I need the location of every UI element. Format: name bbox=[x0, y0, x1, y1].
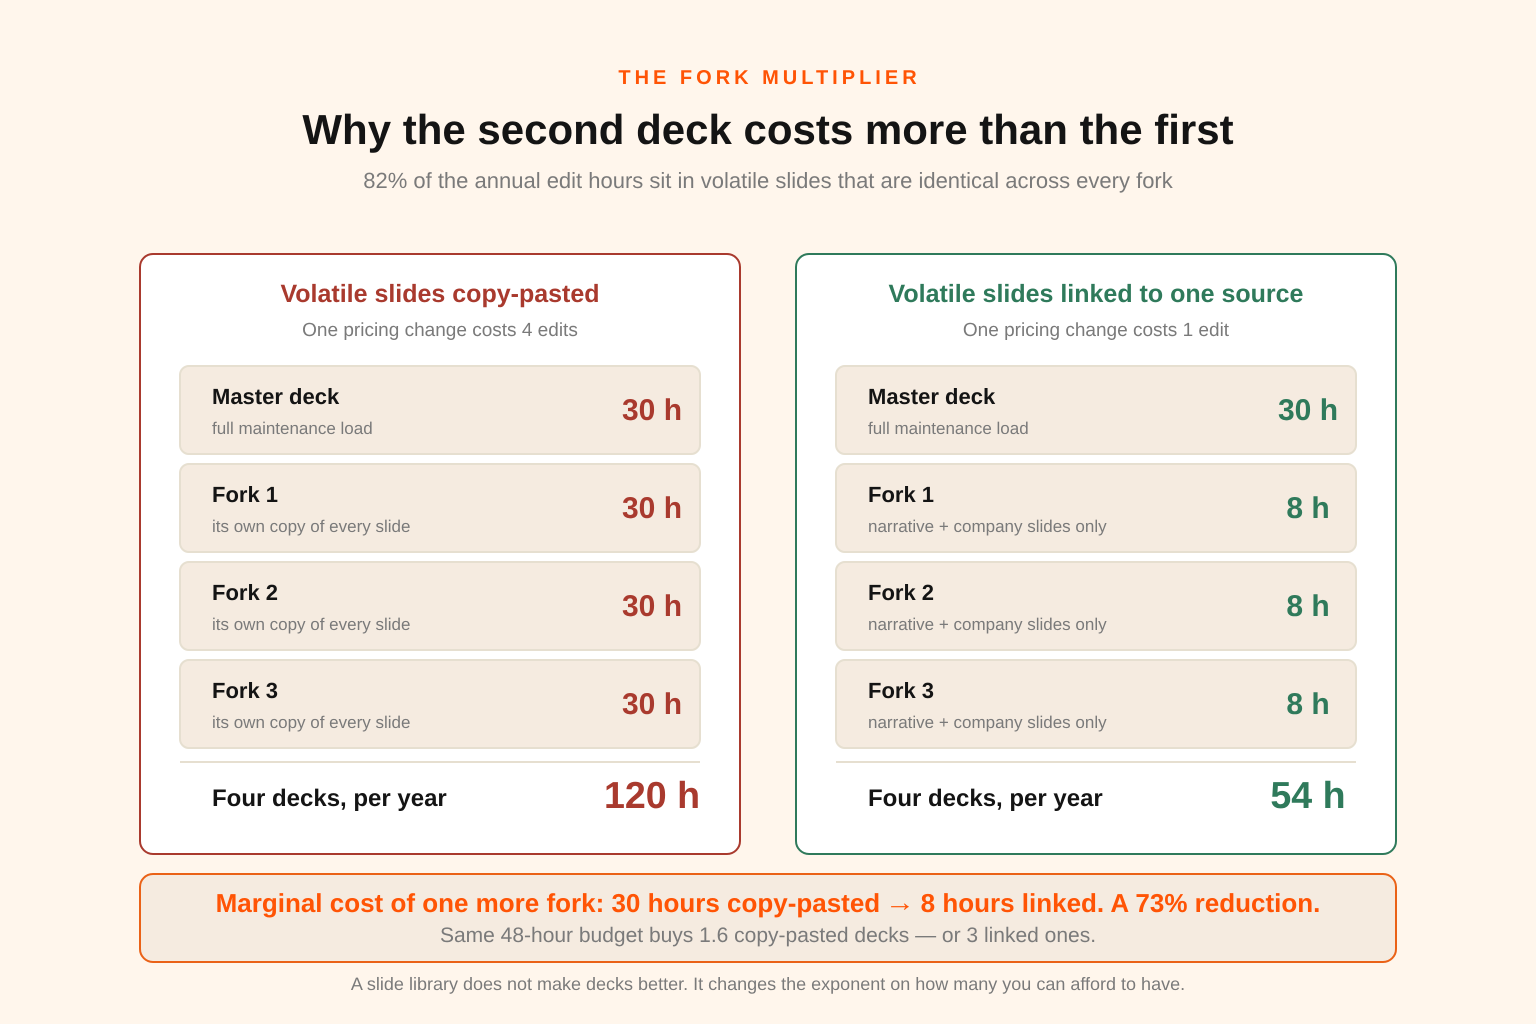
callout subline: Same 48-hour budget buys 1.6 copy-pasted decks — or 3 linked ones. bbox=[440, 924, 1096, 947]
row: fork 1 bbox=[835, 463, 1357, 553]
footer note: A slide library does not make decks better. It changes the exponent on how many you can afford to have. bbox=[351, 974, 1185, 994]
panel subheading: One pricing change costs 1 edit bbox=[963, 320, 1229, 341]
total value: 120 h bbox=[604, 774, 700, 816]
row: fork 3: Fork 3 bbox=[868, 678, 934, 703]
row: fork 1: Fork 1 bbox=[868, 482, 934, 507]
row: fork 1: Fork 1 bbox=[212, 482, 278, 507]
panel heading: Volatile slides copy-pasted bbox=[280, 280, 600, 308]
total value: 54 h bbox=[1270, 774, 1346, 816]
row: master deck: 30 h bbox=[622, 394, 682, 427]
subtitle: 82% of the annual edit hours sit in volatile slides that are identical across every fork bbox=[363, 168, 1173, 193]
row: fork 3: narrative + company slides only bbox=[868, 713, 1107, 732]
row: fork 2: Fork 2 bbox=[212, 580, 278, 605]
row: fork 3: Fork 3 bbox=[212, 678, 278, 703]
total label: Four decks, per year bbox=[212, 785, 447, 812]
row: fork 3: 30 h bbox=[622, 688, 682, 721]
callout headline: → bbox=[885, 887, 915, 917]
total label: Four decks, per year bbox=[868, 785, 1103, 812]
row: fork 2: 30 h bbox=[622, 590, 682, 623]
row: fork 1: its own copy of every slide bbox=[212, 517, 410, 536]
row: fork 3 bbox=[179, 659, 701, 749]
eyebrow: THE FORK MULTIPLIER bbox=[618, 67, 921, 89]
row: master deck bbox=[835, 365, 1357, 455]
panel heading: Volatile slides linked to one source bbox=[889, 280, 1303, 308]
row: master deck bbox=[179, 365, 701, 455]
panel: copy-pasted bbox=[139, 253, 741, 855]
callout headline: Marginal cost of one more fork: 30 hours copy-pasted 8 hours linked. A 73% reduction. bbox=[216, 888, 1320, 918]
panel subheading: One pricing change costs 4 edits bbox=[302, 320, 578, 341]
row: master deck: full maintenance load bbox=[212, 419, 373, 438]
row: fork 1: 30 h bbox=[622, 492, 682, 525]
panel: linked bbox=[795, 253, 1397, 855]
row: fork 1 bbox=[179, 463, 701, 553]
row: fork 2: narrative + company slides only bbox=[868, 615, 1107, 634]
row: master deck: 30 h bbox=[1278, 394, 1338, 427]
row: master deck: Master deck bbox=[212, 384, 339, 409]
row: fork 3: 8 h bbox=[1286, 688, 1330, 721]
row: fork 2 bbox=[835, 561, 1357, 651]
row: master deck: full maintenance load bbox=[868, 419, 1029, 438]
callout bbox=[139, 873, 1397, 963]
row: fork 2: 8 h bbox=[1286, 590, 1330, 623]
row: fork 2: its own copy of every slide bbox=[212, 615, 410, 634]
row: fork 2: Fork 2 bbox=[868, 580, 934, 605]
title: Why the second deck costs more than the first bbox=[302, 106, 1234, 153]
row: fork 1: narrative + company slides only bbox=[868, 517, 1107, 536]
row: fork 3: its own copy of every slide bbox=[212, 713, 410, 732]
row: fork 1: 8 h bbox=[1286, 492, 1330, 525]
row: fork 3 bbox=[835, 659, 1357, 749]
row: master deck: Master deck bbox=[868, 384, 995, 409]
row: fork 2 bbox=[179, 561, 701, 651]
